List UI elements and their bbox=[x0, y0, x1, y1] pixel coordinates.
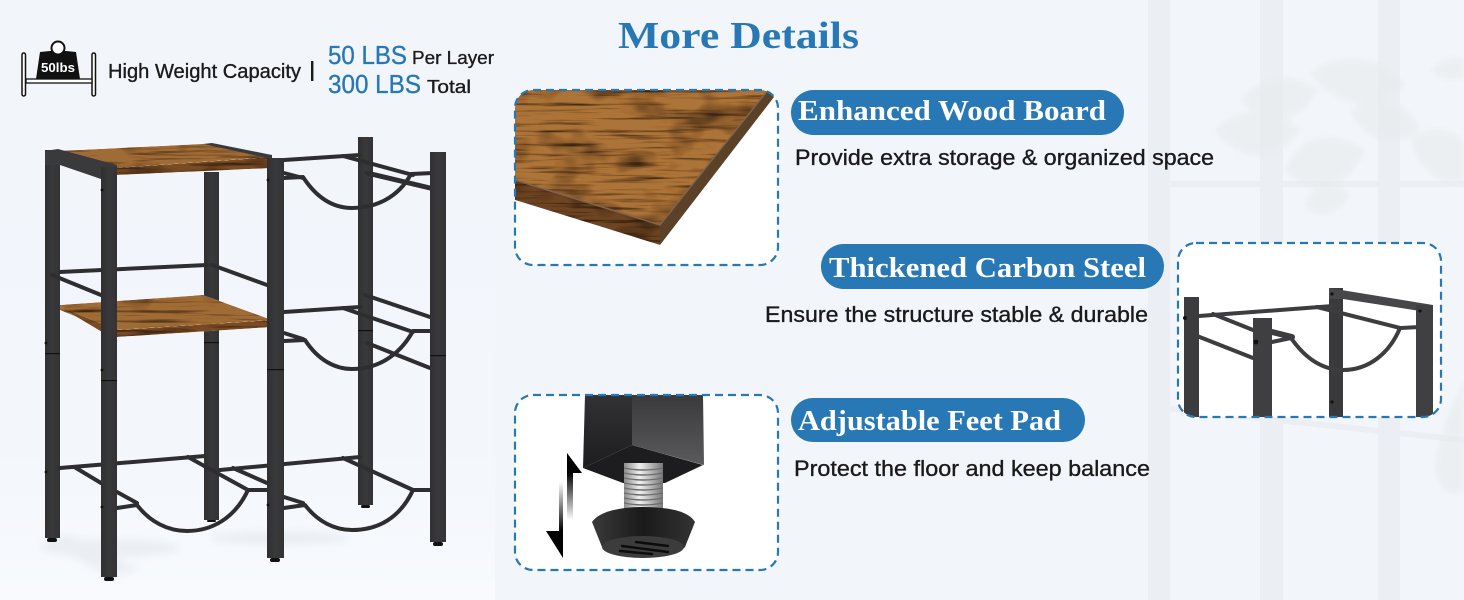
image: wood board corner bbox=[515, 90, 774, 245]
back legs bbox=[45, 137, 373, 538]
heading pill: enhanced wood board bbox=[791, 90, 1124, 135]
front legs bbox=[101, 152, 446, 577]
icon: 50lbs weight on rack bbox=[22, 42, 96, 96]
panel: adjustable foot close-up bbox=[515, 395, 778, 570]
image: steel frame corner bbox=[1183, 288, 1433, 418]
middle wood shelf bbox=[60, 295, 272, 337]
panel: wood board close-up bbox=[515, 90, 778, 265]
text: carbon steel description: Ensure the structure stable & durable bbox=[765, 302, 1148, 327]
label: high weight capacity: High Weight Capacity bbox=[108, 61, 301, 83]
product: three tier rack with wood shelves bbox=[40, 137, 446, 581]
heading pill: adjustable feet pad: Adjustable Feet Pad bbox=[798, 406, 1061, 437]
heading pill: thickened carbon steel: Thickened Carbon Steel bbox=[829, 253, 1146, 284]
arrow: up bbox=[567, 453, 582, 520]
stat: 50 lbs per layer: Per Layer bbox=[412, 48, 494, 68]
stat: 300 lbs total: 300 LBS bbox=[328, 69, 421, 99]
floor shadows bbox=[40, 531, 350, 577]
stat: 50 lbs per layer bbox=[328, 40, 494, 70]
heading pill: adjustable feet pad bbox=[791, 398, 1085, 442]
stat: 300 lbs total: Total bbox=[427, 77, 471, 97]
weight capacity header bbox=[22, 40, 494, 99]
text: wood board description: Provide extra storage & organized space bbox=[795, 145, 1214, 170]
panel: carbon steel close-up bbox=[1178, 243, 1441, 418]
leg joints and feet bbox=[45, 179, 446, 581]
stat: 50 lbs per layer: 50 LBS bbox=[328, 40, 407, 70]
text: feet pad description: Protect the floor and keep balance bbox=[794, 456, 1150, 481]
heading pill: thickened carbon steel bbox=[821, 244, 1164, 289]
rails bbox=[52, 155, 433, 531]
title: More Details bbox=[618, 15, 859, 57]
icon: 50lbs weight on rack: 50lbs bbox=[41, 60, 75, 75]
stat: 300 lbs total bbox=[328, 69, 471, 99]
window frame backdrop bbox=[1148, 0, 1464, 600]
heading pill: enhanced wood board: Enhanced Wood Board bbox=[798, 96, 1106, 127]
image: threaded foot pad bbox=[583, 395, 704, 558]
arrow: down bbox=[546, 482, 563, 558]
faded plant backdrop bbox=[1215, 57, 1464, 494]
top wood shelf bbox=[45, 143, 272, 179]
